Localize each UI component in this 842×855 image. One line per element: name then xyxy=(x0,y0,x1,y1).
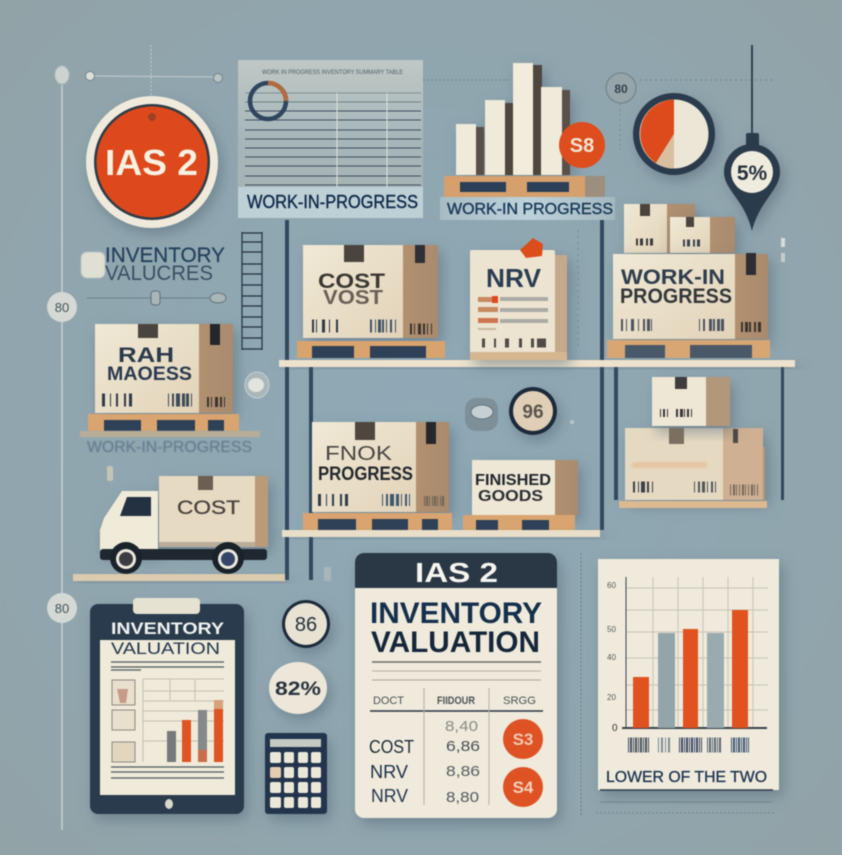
badge: guide number 80 upper: 80 xyxy=(55,300,69,315)
icon: small tag xyxy=(245,372,269,398)
clipboard title: INVENTORY xyxy=(111,619,225,638)
document: NRV: NRV xyxy=(486,263,542,293)
badge: guide number 80 lower xyxy=(47,593,77,623)
shelf: truck xyxy=(73,574,285,581)
panel: IAS 2 inventory valuation table xyxy=(355,553,557,818)
table header: FIIDOUR xyxy=(437,695,475,707)
y-axis labels: 20 xyxy=(607,693,616,702)
badge: small dial xyxy=(606,73,636,103)
data rows xyxy=(478,296,548,330)
icon: delivery truck xyxy=(100,476,268,574)
box: cost: COST xyxy=(318,270,385,293)
card title: VALUATION xyxy=(371,626,540,659)
faded label: work-in-progress: WORK-IN-PROGRESS xyxy=(87,439,252,456)
box: work in progress lower: FNOK xyxy=(325,443,393,465)
badge: 86: 86 xyxy=(295,614,317,636)
table rows: NRV xyxy=(371,786,408,806)
box: finished goods: GOODS xyxy=(478,488,543,505)
table rows: NRV xyxy=(370,762,408,782)
orange tag xyxy=(520,238,543,258)
table rows xyxy=(369,718,480,806)
box: raw materials: RAH xyxy=(118,344,174,367)
barcode labels xyxy=(628,738,749,752)
panel: work-in-progress ledger xyxy=(238,60,423,218)
big box xyxy=(613,254,768,339)
badge: S3 xyxy=(503,719,543,759)
icon: calculator xyxy=(265,733,327,814)
icon: percent pendant xyxy=(724,45,780,231)
small box left xyxy=(624,204,695,253)
y-axis labels: 50 xyxy=(607,625,616,634)
shelf posts xyxy=(285,220,784,580)
icon: delivery truck: COST xyxy=(177,498,240,519)
box: raw materials xyxy=(88,324,239,431)
card title xyxy=(370,597,542,659)
table rows: 8,86 xyxy=(446,763,480,780)
clipboard title: VALUATION xyxy=(111,639,220,658)
guide lines and dotted connectors xyxy=(62,45,775,830)
badge: S4: S4 xyxy=(513,778,534,797)
card title: INVENTORY xyxy=(370,597,542,630)
table rows: 8,80 xyxy=(446,789,479,806)
rule lines xyxy=(370,662,543,805)
table header: SRGG xyxy=(503,695,536,707)
carton xyxy=(303,245,438,338)
heading: inventory valuation xyxy=(105,244,225,285)
box: raw materials: MAOESS xyxy=(107,364,192,385)
pallet xyxy=(444,176,605,197)
box: finished goods: FINISHED xyxy=(475,472,551,489)
small box right xyxy=(670,217,735,253)
table rows: 6,86 xyxy=(446,738,480,755)
ledger header text: WORK IN PROGRESS INVENTORY SUMMARY TABLE xyxy=(262,70,403,76)
boxes: work-in-progress stack xyxy=(607,204,770,358)
badge: 82% xyxy=(269,662,327,714)
mini bars xyxy=(167,700,223,762)
panel: work-in-progress ledger: WORK-IN-PROGRESS xyxy=(247,192,418,212)
small guide markers xyxy=(55,66,785,581)
box: work in progress lower xyxy=(303,422,452,530)
badge: guide number 80 lower: 80 xyxy=(55,601,69,616)
badge: S$: S8 xyxy=(570,135,594,157)
clip xyxy=(133,598,200,614)
clipboard: inventory valuation xyxy=(90,598,244,814)
shelf: raw materials xyxy=(80,431,260,437)
table header xyxy=(373,695,536,707)
boxes: unlabelled stack xyxy=(619,377,767,508)
icon: rounded gauge xyxy=(465,398,498,431)
panel: lower of the two chart xyxy=(598,559,779,790)
bars xyxy=(633,610,748,728)
badge: IAS 2 xyxy=(86,96,218,228)
y-axis labels: 60 xyxy=(607,581,616,590)
icon: percent pendant: 5% xyxy=(737,162,767,185)
pallet xyxy=(607,340,770,358)
y-axis labels: 0 xyxy=(612,723,618,734)
badge: S$ xyxy=(559,122,605,168)
mini grid xyxy=(143,679,224,762)
rule lines xyxy=(111,662,224,778)
badge: small dial: 80 xyxy=(614,82,628,96)
pie chart xyxy=(633,93,715,175)
box: work in progress lower: PROGRESS xyxy=(318,464,413,485)
card header: IAS 2 xyxy=(415,557,498,588)
badge: percent dial xyxy=(509,387,557,435)
label band: work-in-progress: WORK-IN PROGRESS xyxy=(447,201,613,218)
badge: S4 xyxy=(503,767,543,807)
bar chart: stock pallet xyxy=(444,63,605,197)
boxes: work-in-progress stack: PROGRESS xyxy=(620,285,732,308)
box: cost xyxy=(297,245,445,358)
table header: DOCT xyxy=(373,695,404,707)
table rows: 8,40 xyxy=(445,718,478,735)
badge: 86 xyxy=(282,600,330,648)
boxes: work-in-progress stack: WORK-IN xyxy=(621,266,725,289)
panel: lower of the two chart: LOWER OF THE TWO xyxy=(606,769,767,786)
badge: IAS 2: IAS 2 xyxy=(105,142,198,183)
badge: guide number 80 upper xyxy=(47,292,77,322)
home button xyxy=(165,799,173,809)
badge: S3: S3 xyxy=(513,730,533,749)
table rows: COST xyxy=(369,737,414,757)
document: NRV xyxy=(470,238,567,360)
icon: ladder rack xyxy=(242,232,262,350)
shelf: lower xyxy=(282,530,600,537)
grid xyxy=(626,577,768,728)
ledger rows xyxy=(245,93,421,187)
y-axis labels: 40 xyxy=(607,653,616,662)
shelf: upper xyxy=(279,360,795,367)
badge: 82%: 82% xyxy=(275,679,321,700)
ledger donut xyxy=(250,83,286,119)
card header xyxy=(355,553,557,588)
thumbnails xyxy=(112,680,135,762)
box: cost: VOST xyxy=(323,287,383,309)
heading: inventory valuation: VALUCRES xyxy=(105,262,213,285)
heading: inventory valuation: INVENTORY xyxy=(105,244,225,267)
y-axis labels xyxy=(607,581,618,734)
badge: percent dial: 96 xyxy=(522,402,544,423)
bars xyxy=(456,63,570,175)
box: finished goods xyxy=(463,460,578,530)
clipboard title xyxy=(111,619,225,658)
axes xyxy=(622,577,767,728)
pallet xyxy=(297,341,445,358)
